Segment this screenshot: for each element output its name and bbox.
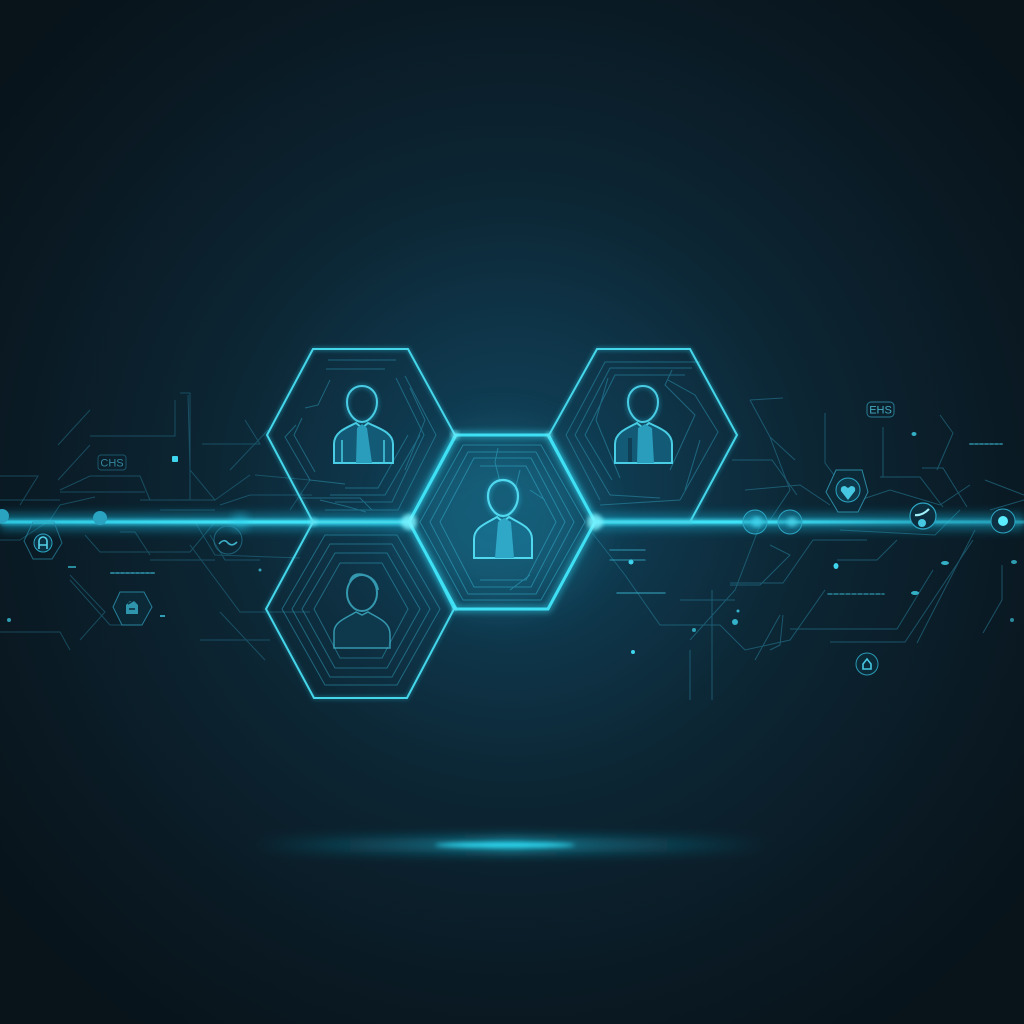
label: right chip	[867, 402, 894, 417]
person: center	[474, 480, 532, 558]
person: upper left	[334, 386, 393, 463]
circuit traces: left	[0, 393, 312, 660]
scattered data dots	[7, 432, 1017, 654]
icon: left hex badge	[113, 592, 152, 625]
icon: left hex lock	[24, 522, 62, 559]
icon: beam nodes	[0, 509, 802, 534]
label: left chip: CHS	[100, 458, 124, 470]
hexagon cluster	[266, 349, 737, 698]
hexagon: upper right	[549, 349, 737, 522]
data ticks	[111, 444, 1002, 594]
glow behind hexagons	[405, 435, 595, 605]
icon: right node	[910, 503, 936, 529]
icon: right hex heart	[826, 470, 868, 512]
person: upper right	[615, 386, 672, 463]
horizontal light beam: left and right segments	[0, 514, 1024, 530]
icon: right beacon	[991, 509, 1015, 533]
person: lower left	[334, 574, 390, 648]
circuit traces: right	[590, 398, 1024, 700]
icon: left gauge	[214, 526, 242, 554]
label: right chip: EHS	[869, 404, 892, 416]
icon: lower right lock	[856, 653, 878, 675]
label: left chip	[98, 455, 126, 470]
hexagon: center	[409, 435, 595, 609]
hexagon: lower left	[266, 522, 454, 698]
hexagon: upper left	[267, 349, 455, 522]
floor glow	[250, 838, 770, 852]
junction glows	[232, 431, 762, 611]
